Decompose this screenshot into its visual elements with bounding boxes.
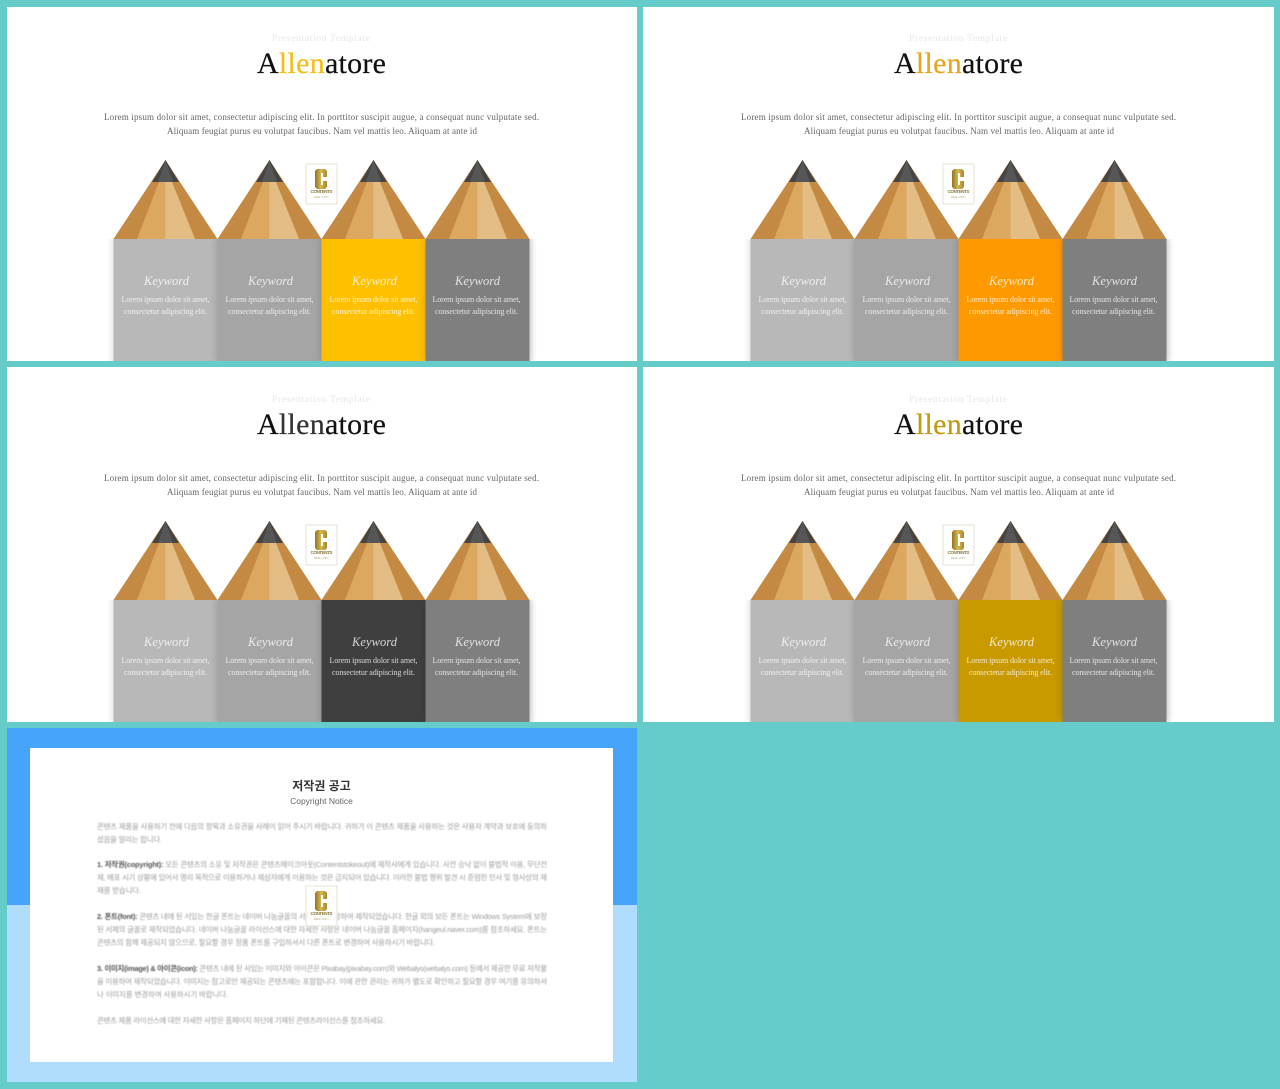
keyword block 1 [758,274,846,316]
contents badge: CONTENTS [310,189,332,194]
panel: slide 2 orange [643,7,1274,365]
keyword block 2: consectetur adipiscing elit. [228,668,311,677]
pencil tip 4 [426,160,530,239]
pencil tip 2 [854,521,958,600]
keyword block 4: Lorem ipsum dolor sit amet, [432,656,520,665]
keyword block 2: Lorem ipsum dolor sit amet, [862,656,950,665]
contents badge [306,164,337,204]
subtitle: Presentation Template [272,395,370,405]
pencil tip 1 [114,160,218,239]
keyword block 3: consectetur adipiscing elit. [332,668,415,677]
keyword block 3: Keyword [988,274,1035,288]
keyword block 4 [1070,635,1158,677]
title: Allenatore [894,47,1023,80]
keyword block 2: Lorem ipsum dolor sit amet, [862,295,950,304]
pencil tip 1 [114,521,218,600]
keyword block 3: Keyword [988,635,1035,649]
intro paragraph: Aliquam feugiat purus eu volutpat faucibus. Nam vel mattis leo. Aliquam at ante id [804,487,1114,497]
intro paragraph [741,112,1176,136]
pencil tip 4 [426,521,530,600]
keyword block 3: Lorem ipsum dolor sit amet, [966,295,1054,304]
keyword block 4 [432,635,520,677]
pencil tip 1 [750,160,854,239]
pencil tip 3 [322,521,426,600]
keyword block 3 [330,274,418,316]
keyword block 3: consectetur adipiscing elit. [969,668,1052,677]
pencil tip 1 [750,521,854,600]
pencil tip 3 [958,521,1062,600]
intro paragraph: Lorem ipsum dolor sit amet, consectetur adipiscing elit. In porttitor suscipit augue, a consequat nunc vulputate sed. [104,112,539,122]
pencil bars [114,235,530,365]
section 1 copyright [97,860,547,895]
license note: 콘텐츠 제품 라이선스에 대한 자세한 사항은 홈페이지 하단에 기재된 콘텐츠라이선스를 참조하세요. [97,1016,385,1025]
pencil tip 2 [218,160,322,239]
keyword block 1: Keyword [143,635,190,649]
contents badge [306,886,337,926]
keyword block 2: Keyword [884,274,931,288]
section 2 font: 2. 폰트(font): 콘텐츠 내에 된 서있는 한글 폰트는 네이버 나눔글꼴의 서작물로 포함하여 제작되었습니다. 한글 외의 보든 폰트는 Windows System에 보장 [97,912,547,921]
contents badge: CONTENTS [948,550,970,555]
keyword block 2 [226,635,314,677]
keyword block 3 [330,635,418,677]
contents badge: REAL COPY [314,195,329,199]
keyword block 4: Keyword [454,274,501,288]
keyword block 1: Lorem ipsum dolor sit amet, [758,656,846,665]
keyword block 4 [432,274,520,316]
contents badge: REAL COPY [951,556,966,560]
notice intro: 콘텐츠 제품을 사용하기 전에 다음의 항목과 소유권을 사례이 읽어 주시기 바랍니다. 귀하가 이 콘텐츠 제품을 사용하는 것은 사용자 계약과 보호에 동의하 [97,822,547,831]
keyword block 4: consectetur adipiscing elit. [1072,668,1155,677]
contents badge: REAL COPY [314,556,329,560]
section 2 font: 된 서체의 글꼴로 제작되었습니다. 네이버 나눔글꼴 라이선스에 대한 자세한 사항은 네이버 나눔글꼴 홈페이지(hangeul.naver.com)를 참조하세요. 폰트는 [97,925,547,934]
contents badge: CONTENTS [948,189,970,194]
keyword block 3: Keyword [351,635,398,649]
keyword block 2: Lorem ipsum dolor sit amet, [226,295,314,304]
keyword block 2 [226,274,314,316]
keyword block 2: Keyword [247,635,294,649]
keyword block 1: consectetur adipiscing elit. [124,307,207,316]
panel: slide 3 charcoal [7,367,637,726]
keyword block 3: consectetur adipiscing elit. [332,307,415,316]
keyword block 1: Lorem ipsum dolor sit amet, [122,295,210,304]
pencil bars [114,596,530,726]
pencil bars [750,235,1166,365]
pencil tip 4 [1062,521,1166,600]
keyword block 2: consectetur adipiscing elit. [865,307,948,316]
keyword block 4: consectetur adipiscing elit. [435,307,518,316]
section 1 copyright: 재를 받습니다. [97,886,141,895]
pencil bars [750,596,1166,726]
contents badge: CONTENTS [310,911,332,916]
keyword block 3 [966,635,1054,677]
keyword block 3: Keyword [351,274,398,288]
keyword block 4: Keyword [454,635,501,649]
intro paragraph: Lorem ipsum dolor sit amet, consectetur adipiscing elit. In porttitor suscipit augue, a consequat nunc vulputate sed. [741,473,1176,483]
keyword block 3 [966,274,1054,316]
panel: copyright notice [7,728,637,1082]
keyword block 1: Lorem ipsum dolor sit amet, [758,295,846,304]
intro paragraph [104,473,539,497]
contents badge [306,525,337,565]
keyword block 4: Keyword [1091,635,1138,649]
keyword block 1: Lorem ipsum dolor sit amet, [122,656,210,665]
keyword block 1 [122,635,210,677]
keyword block 4: Keyword [1091,274,1138,288]
keyword block 4 [1070,274,1158,316]
pencil tip 3 [958,160,1062,239]
intro paragraph [741,473,1176,497]
keyword block 2 [862,274,950,316]
keyword block 1: Keyword [143,274,190,288]
keyword block 4: consectetur adipiscing elit. [435,668,518,677]
pencil tip 3 [322,160,426,239]
section 1 copyright: 1. 저작권(copyright): 모든 콘텐츠의 소유 및 저작권은 콘텐츠메이크아웃(Contentstokeout)에 제작사에게 있습니다. 사전 승낙 없이 불법적 이용, 무단전 [97,860,547,869]
keyword block 4: Lorem ipsum dolor sit amet, [432,295,520,304]
keyword block 3: Lorem ipsum dolor sit amet, [330,656,418,665]
contents badge: REAL COPY [314,917,329,921]
keyword block 2: Lorem ipsum dolor sit amet, [226,656,314,665]
keyword block 2 [862,635,950,677]
subtitle: Presentation Template [272,34,370,44]
notice intro [97,822,547,844]
keyword block 1: consectetur adipiscing elit. [761,307,844,316]
panel: slide 1 yellow [7,7,637,365]
keyword block 4: Lorem ipsum dolor sit amet, [1070,295,1158,304]
section 3 image and icon: 을 이용하여 제작되었습니다. 이미지는 참고로만 제공되는 콘텐츠에는 포함합니다. 이에 관한 권리는 귀하가 별도로 확인하고 필요할 경우 여기를 유의하셔 [97,977,547,986]
intro paragraph: Lorem ipsum dolor sit amet, consectetur adipiscing elit. In porttitor suscipit augue, a consequat nunc vulputate sed. [104,473,539,483]
title: Allenatore [257,47,386,80]
keyword block 1 [758,635,846,677]
notice intro: 셨음을 알리는 합니다. [97,835,162,844]
keyword block 4: consectetur adipiscing elit. [1072,307,1155,316]
keyword block 3: consectetur adipiscing elit. [969,307,1052,316]
contents badge: REAL COPY [951,195,966,199]
section 3 image and icon [97,964,547,999]
keyword block 1: Keyword [780,635,827,649]
subtitle: Presentation Template [909,395,1007,405]
keyword block 1 [122,274,210,316]
pencil tip 2 [854,160,958,239]
keyword block 2: Keyword [247,274,294,288]
pencil tip 4 [1062,160,1166,239]
keyword block 1: consectetur adipiscing elit. [124,668,207,677]
section 3 image and icon: 3. 이미지(image) & 아이콘(icon): 콘텐츠 내에 된 사있는 이미지와 아이콘은 Pixabay(pixabay.com)와 Webalys(webalys.com) 등에서 제공한 무료 저작물 [97,964,547,973]
keyword block 3: Lorem ipsum dolor sit amet, [966,656,1054,665]
section 2 font [97,912,547,947]
section 3 image and icon: 나 이미지를 변경하여 사용하시기 바랍니다. [97,990,228,999]
pencil tip 2 [218,521,322,600]
intro paragraph: Lorem ipsum dolor sit amet, consectetur adipiscing elit. In porttitor suscipit augue, a consequat nunc vulputate sed. [741,112,1176,122]
intro paragraph [104,112,539,136]
keyword block 4: Lorem ipsum dolor sit amet, [1070,656,1158,665]
contents badge [943,164,974,204]
keyword block 1: Keyword [780,274,827,288]
copyright subheading: Copyright Notice [290,796,353,806]
subtitle: Presentation Template [909,34,1007,44]
intro paragraph: Aliquam feugiat purus eu volutpat faucibus. Nam vel mattis leo. Aliquam at ante id [167,126,478,136]
keyword block 3: Lorem ipsum dolor sit amet, [330,295,418,304]
contents badge [943,525,974,565]
panel: slide 4 mustard [643,367,1274,726]
title: Allenatore [257,408,386,441]
title: Allenatore [894,408,1023,441]
intro paragraph: Aliquam feugiat purus eu volutpat faucibus. Nam vel mattis leo. Aliquam at ante id [804,126,1114,136]
contents badge: CONTENTS [310,550,332,555]
section 1 copyright: 제, 배포 시기 상황에 있어서 영리 목적으로 이용하거나 제삼자에게 이용하는 것은 금지되어 있습니다. 이러한 불법 행위 발견 시 준엄한 민사 및 형사상의 제 [97,873,547,882]
keyword block 2: consectetur adipiscing elit. [228,307,311,316]
keyword block 2: Keyword [884,635,931,649]
keyword block 1: consectetur adipiscing elit. [761,668,844,677]
section 2 font: 콘텐츠의 함께 제공되지 않으므로, 필요할 경우 정품 폰트를 구입하셔서 다른 폰트로 변경하여 사용하시기 바랍니다. [97,938,435,947]
intro paragraph: Aliquam feugiat purus eu volutpat faucibus. Nam vel mattis leo. Aliquam at ante id [167,487,478,497]
copyright heading: 저작권 공고 [292,778,351,793]
keyword block 2: consectetur adipiscing elit. [865,668,948,677]
